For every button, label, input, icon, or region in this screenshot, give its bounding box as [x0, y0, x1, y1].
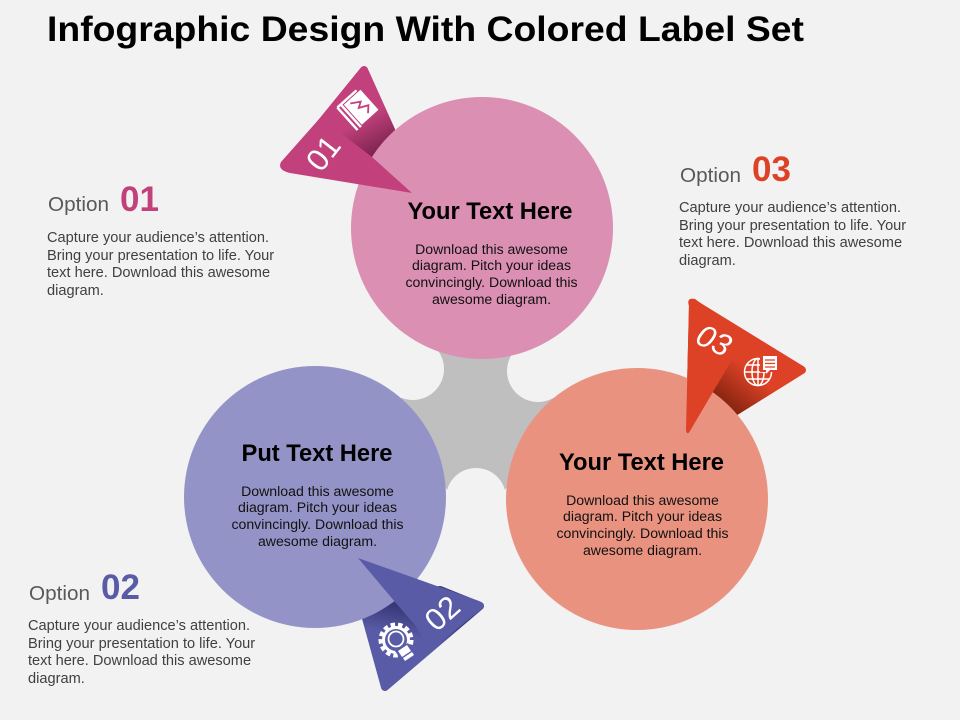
- circle: pink: [351, 97, 613, 359]
- option 02 text block: [28, 568, 255, 687]
- tag 03 front: [686, 299, 736, 433]
- circle text: pink: [405, 199, 578, 307]
- title: Infographic Design With Colored Label Set: [47, 10, 804, 49]
- tag 02 front: [358, 558, 484, 650]
- circle text: purple: Download this awesome: [241, 483, 394, 499]
- option 03 text block: [679, 150, 906, 269]
- circle text: pink: diagram. Pitch your ideas: [412, 257, 571, 273]
- circle text: pink: awesome diagram.: [432, 291, 551, 307]
- circle text: purple: diagram. Pitch your ideas: [238, 499, 397, 515]
- option 01 text block: 01: [120, 180, 159, 219]
- tag number 03: 03: [691, 317, 737, 364]
- option 03 text block: Bring your presentation to life. Your: [679, 218, 906, 234]
- option 01 text block: Option: [48, 193, 109, 216]
- circle text: salmon: [556, 450, 729, 558]
- option 02 text block: diagram.: [28, 671, 85, 687]
- option 03 text block: 03: [752, 150, 791, 189]
- icon: chart document: [337, 88, 379, 130]
- option 02 text block: text here. Download this awesome: [28, 653, 251, 669]
- option 03 text block: Capture your audience’s attention.: [679, 200, 901, 216]
- tag 02 back: [361, 590, 480, 687]
- circle text: salmon: diagram. Pitch your ideas: [563, 508, 722, 524]
- circle text: purple: [231, 441, 404, 549]
- circle text: purple: awesome diagram.: [258, 533, 377, 549]
- option 02 text block: Option: [29, 582, 90, 605]
- tag 01 back: [286, 70, 391, 172]
- circle text: purple: Put Text Here: [242, 441, 392, 467]
- circle text: salmon: convincingly. Download this: [556, 525, 729, 541]
- circle text: salmon: Download this awesome: [566, 492, 719, 508]
- circle text: salmon: awesome diagram.: [583, 542, 702, 558]
- circle text: pink: Your Text Here: [408, 199, 572, 225]
- option 03 text block: Option: [680, 164, 741, 187]
- option 01 text block: [47, 180, 274, 299]
- circle text: salmon: Your Text Here: [559, 450, 724, 476]
- tag number 01: 01: [299, 129, 348, 178]
- icon: gear with light bulb: [380, 624, 415, 661]
- option 02 text block: Bring your presentation to life. Your: [28, 636, 255, 652]
- option 01 text block: diagram.: [47, 283, 104, 299]
- circle: salmon: [506, 368, 768, 630]
- option 01 text block: text here. Download this awesome: [47, 265, 270, 281]
- option 03 text block: text here. Download this awesome: [679, 235, 902, 251]
- circle text: pink: convincingly. Download this: [405, 274, 578, 290]
- tag 03 back: [690, 303, 802, 430]
- circle: purple: [184, 366, 446, 628]
- option 01 text block: Bring your presentation to life. Your: [47, 248, 274, 264]
- option 03 text block: diagram.: [679, 253, 736, 269]
- circle text: purple: convincingly. Download this: [231, 516, 404, 532]
- option 02 text block: Capture your audience’s attention.: [28, 618, 250, 634]
- option 02 text block: 02: [101, 568, 140, 607]
- tag 01 front: [280, 118, 412, 193]
- central gray connector: [382, 338, 569, 528]
- tag number 02: 02: [418, 589, 467, 638]
- option 01 text block: Capture your audience’s attention.: [47, 230, 269, 246]
- circle text: pink: Download this awesome: [415, 241, 568, 257]
- icon: globe with speech bubble: [744, 354, 779, 386]
